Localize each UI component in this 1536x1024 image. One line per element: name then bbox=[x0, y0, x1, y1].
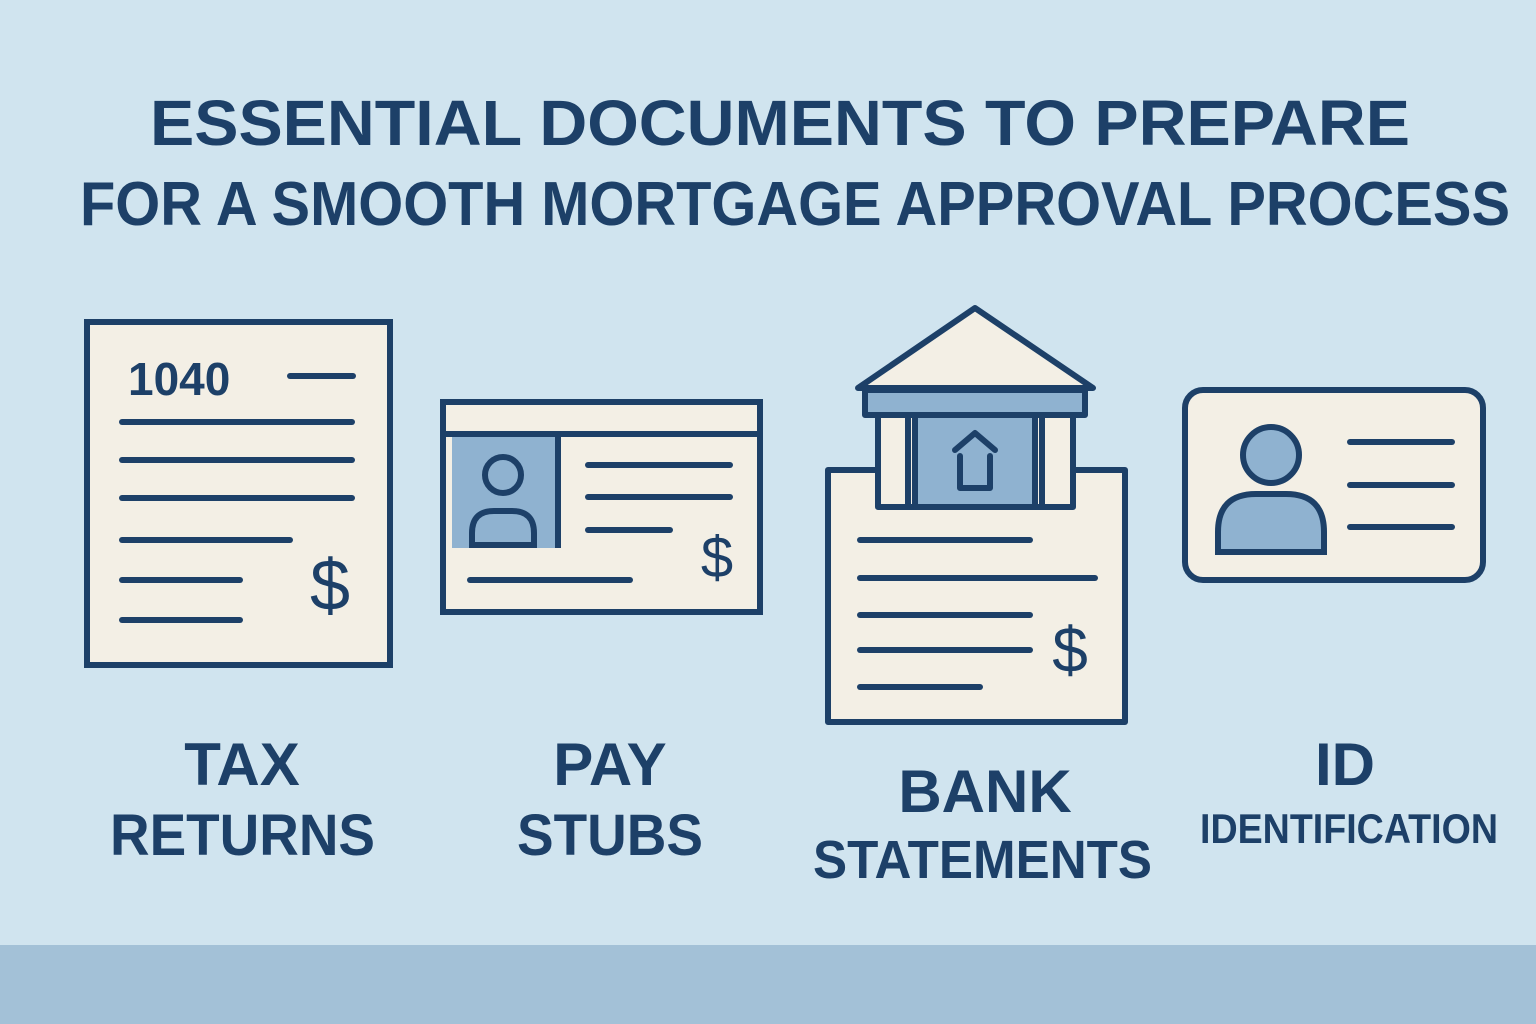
label: bank statements bbox=[813, 758, 1152, 890]
label: pay stubs: PAY bbox=[553, 731, 667, 798]
icon: tax return form: 1040 bbox=[128, 353, 230, 405]
label: bank statements: STATEMENTS bbox=[813, 830, 1152, 890]
icon: bank statement bbox=[828, 308, 1125, 722]
label: pay stubs bbox=[517, 731, 703, 868]
title bbox=[80, 87, 1510, 239]
icon: tax return form: $ bbox=[310, 546, 350, 626]
icon: bank statement: $ bbox=[1052, 614, 1088, 686]
icon: pay stub bbox=[443, 402, 760, 612]
icon: ID card bbox=[1185, 390, 1483, 580]
label: tax returns: RETURNS bbox=[110, 803, 375, 868]
label: bank statements: BANK bbox=[898, 758, 1072, 825]
label: ID bbox=[1200, 731, 1498, 852]
icon: tax return form bbox=[87, 322, 390, 665]
label: ID: ID bbox=[1315, 731, 1375, 798]
label: ID: IDENTIFICATION bbox=[1200, 805, 1498, 852]
title: ESSENTIAL DOCUMENTS TO PREPARE bbox=[150, 87, 1410, 159]
bottom band bbox=[0, 945, 1536, 1024]
icon: pay stub: $ bbox=[701, 525, 733, 590]
label: tax returns: TAX bbox=[184, 731, 300, 798]
label: pay stubs: STUBS bbox=[517, 803, 703, 868]
label: tax returns bbox=[110, 731, 375, 868]
